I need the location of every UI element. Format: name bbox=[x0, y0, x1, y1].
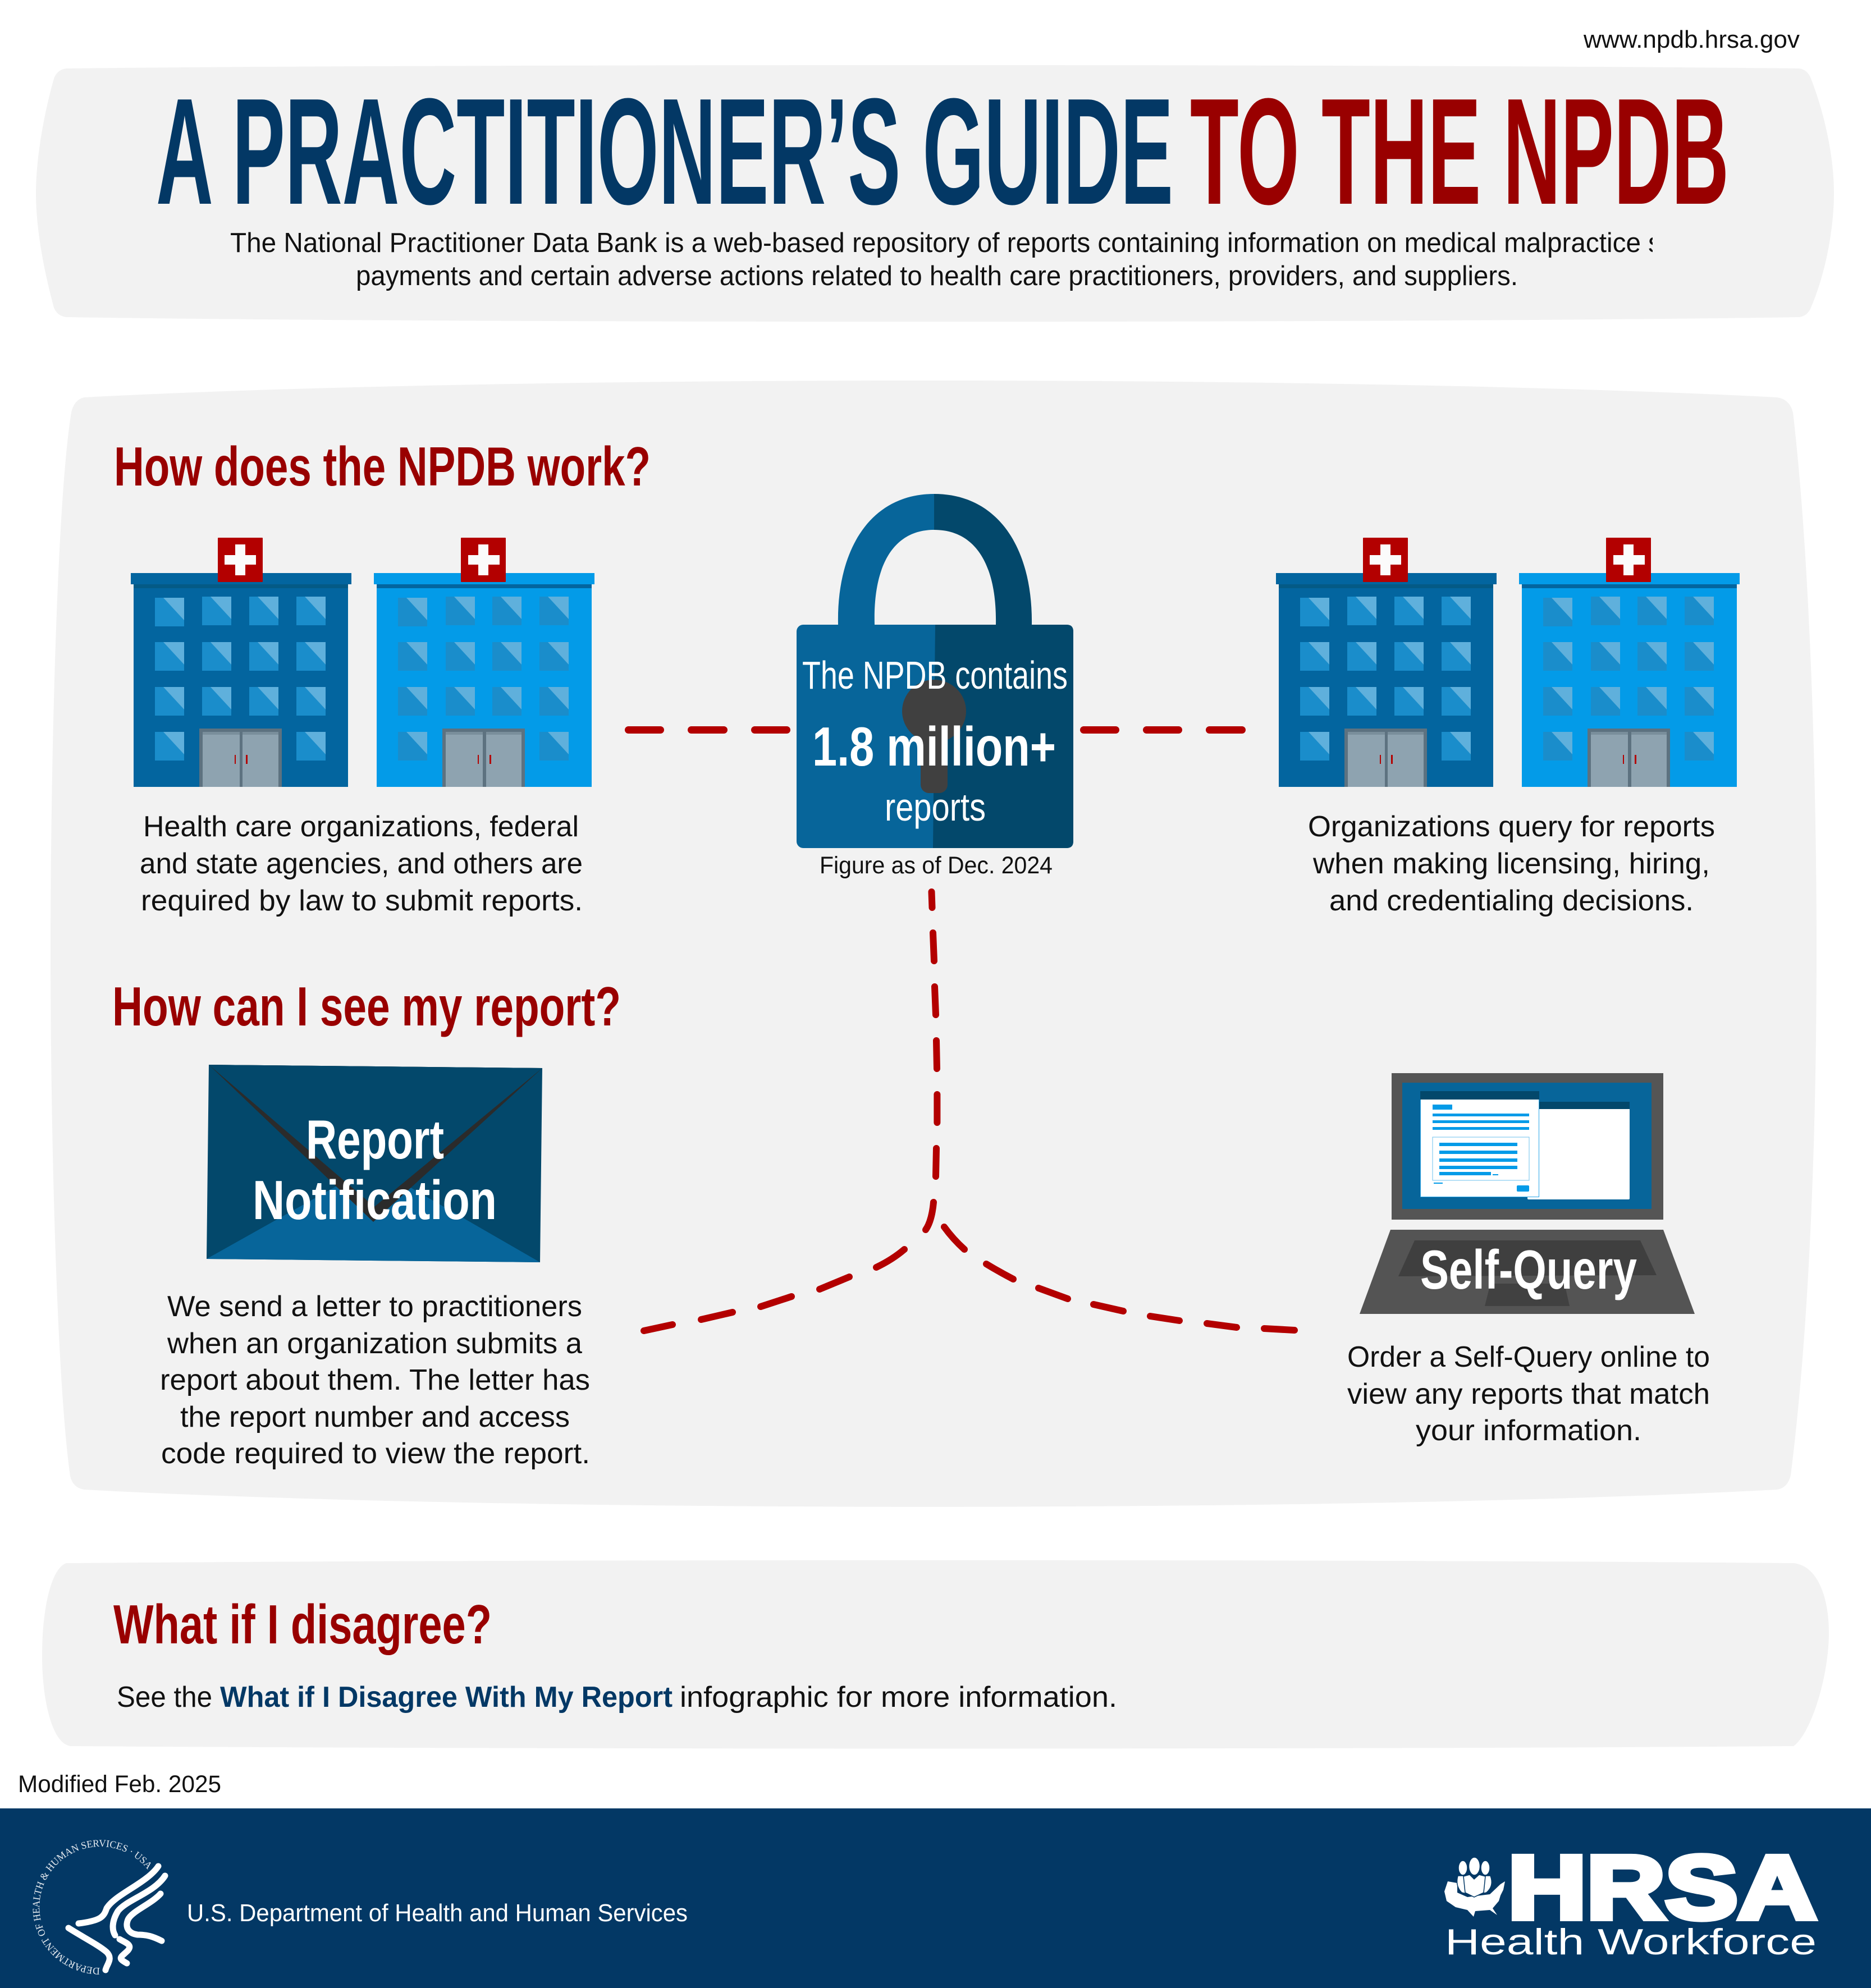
intro text: payments and certain adverse actions related to health care practitioners, providers, and suppliers. bbox=[356, 261, 1518, 291]
text: disagree link: What if I Disagree With My Report bbox=[220, 1681, 673, 1714]
text: self-query explanation: your information. bbox=[1416, 1414, 1641, 1447]
text: letter explanation: the report number and access bbox=[180, 1401, 570, 1433]
text: self-query explanation bbox=[1347, 1341, 1710, 1447]
laptop label: Self-Query bbox=[1420, 1239, 1637, 1300]
text: letter explanation: code required to view the report. bbox=[161, 1437, 590, 1470]
heading: how does the NPDB work: How does the NPDB work? bbox=[114, 436, 651, 497]
text: letter explanation bbox=[160, 1290, 590, 1470]
envelope label: Report bbox=[306, 1108, 444, 1170]
arrow: dashed link right bbox=[1080, 726, 1246, 734]
text: modified date: Modified Feb. 2025 bbox=[18, 1771, 221, 1798]
envelope label: Notification bbox=[253, 1169, 497, 1231]
panel: how it works bbox=[51, 381, 1817, 1507]
icon: padlock with stat bbox=[797, 494, 1073, 848]
text: submitters: Health care organizations, federal bbox=[143, 810, 579, 843]
text: self-query explanation: view any reports that match bbox=[1347, 1378, 1710, 1410]
icon: envelope bbox=[207, 1065, 542, 1262]
text: letter explanation: when an organization submits a bbox=[167, 1327, 582, 1360]
heading: what if I disagree: What if I disagree? bbox=[113, 1593, 492, 1655]
footer band bbox=[0, 1808, 1871, 1988]
text: submitters: and state agencies, and others are bbox=[140, 848, 583, 880]
text: queriers: when making licensing, hiring, bbox=[1312, 848, 1710, 880]
text: submitters: required by law to submit reports. bbox=[141, 885, 583, 917]
stat text bbox=[802, 653, 1068, 829]
panel: what if I disagree bbox=[42, 1560, 1829, 1749]
icon: submitting buildings bbox=[131, 538, 594, 787]
stat text: reports bbox=[885, 785, 986, 829]
intro text: s bbox=[1648, 228, 1662, 258]
stat text: The NPDB contains bbox=[802, 653, 1068, 697]
arrow: dashed branching line bbox=[644, 892, 1294, 1331]
text: letter explanation: We send a letter to practitioners bbox=[167, 1290, 582, 1323]
text: queriers: and credentialing decisions. bbox=[1329, 885, 1694, 917]
text: disagree link bbox=[117, 1681, 1117, 1714]
icon: HHS seal: DEPARTMENT OF HEALTH & HUMAN SERVICES · USA bbox=[33, 1840, 150, 1975]
icon: HRSA emblem bbox=[1444, 1857, 1505, 1917]
icon: laptop bbox=[1360, 1073, 1695, 1314]
arrow: dashed link left bbox=[625, 726, 790, 734]
text: disagree link: See the bbox=[117, 1681, 212, 1714]
text: queriers: Organizations query for reports bbox=[1308, 810, 1715, 843]
envelope label bbox=[253, 1108, 497, 1231]
intro text: The National Practitioner Data Bank is a web-based repository of reports containing information on medical malpractice bbox=[230, 228, 1641, 258]
text: self-query explanation: Order a Self-Query online to bbox=[1347, 1341, 1710, 1373]
text: HRSA logo: Health Workforce bbox=[1445, 1921, 1817, 1962]
text: queriers bbox=[1308, 810, 1715, 917]
text: submitters bbox=[140, 810, 583, 917]
intro text bbox=[230, 228, 1662, 291]
text: HRSA logo: HRSA bbox=[1508, 1837, 1817, 1937]
panel: header bbox=[36, 65, 1834, 322]
text: disagree link: infographic for more information. bbox=[680, 1681, 1117, 1714]
stat text: 1.8 million+ bbox=[812, 716, 1056, 777]
caption: figure date: Figure as of Dec. 2024 bbox=[820, 852, 1053, 879]
website url: www.npdb.hrsa.gov bbox=[1583, 26, 1800, 53]
icon: querying buildings bbox=[1276, 538, 1740, 787]
text: letter explanation: report about them. The letter has bbox=[160, 1364, 590, 1396]
text: HHS name: U.S. Department of Health and Human Services bbox=[187, 1899, 688, 1927]
heading: how can I see my report: How can I see my report? bbox=[112, 975, 621, 1037]
text: HRSA logo bbox=[1445, 1837, 1817, 1962]
